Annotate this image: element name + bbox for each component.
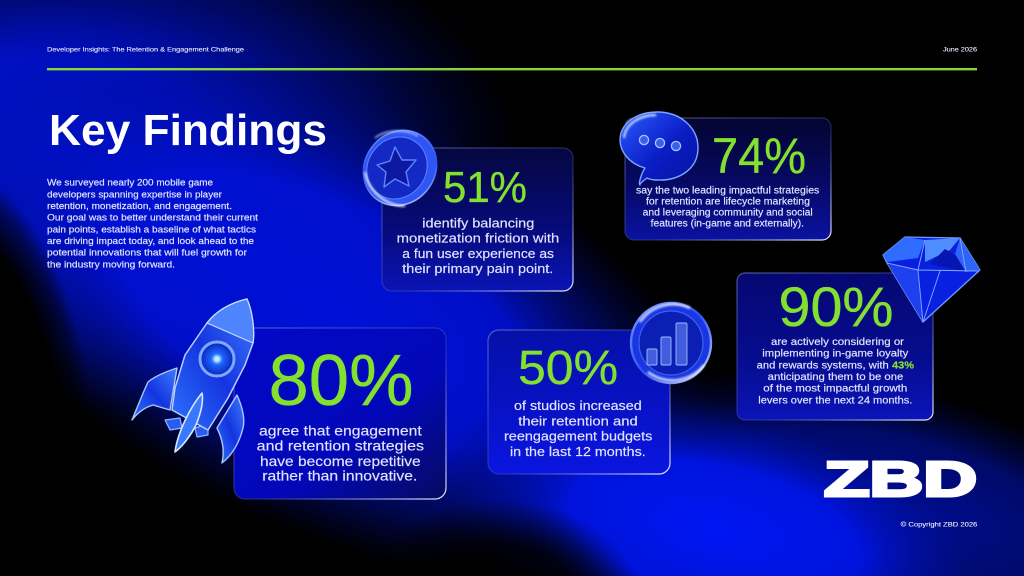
intro text block: Our goal was to better understand their current <box>47 213 259 223</box>
intro text block: potential innovations that will fuel growth for <box>47 248 247 258</box>
80% description: agree that engagement <box>259 423 422 439</box>
50% description: their retention and <box>518 413 638 428</box>
90% description: levers over the next 24 months. <box>758 395 912 406</box>
rocket nose cone <box>207 299 254 343</box>
51% description: a fun user experience as <box>402 246 555 261</box>
74% description: and leveraging community and social <box>643 208 813 219</box>
intro text block: are driving impact today, and look ahead to the <box>47 236 254 246</box>
icon: diamond <box>883 237 980 322</box>
74% description: features (in-game and externally). <box>651 219 804 230</box>
90% figure: 90% <box>778 275 894 338</box>
rocket window <box>200 342 234 376</box>
90% description: implementing in-game loyalty <box>762 349 908 360</box>
51% figure: 51% <box>443 163 527 212</box>
icon: chat bubble <box>620 112 698 185</box>
panel: 50% stat <box>488 330 670 474</box>
copyright: © Copyright ZBD 2026 <box>901 521 978 529</box>
logo: ZBD: ZBD <box>824 452 977 507</box>
panel: 74% stat <box>625 118 831 240</box>
74% description: for retention are lifecycle marketing <box>646 196 810 207</box>
rocket body <box>172 299 254 430</box>
90% description: and rewards systems, with <box>757 360 889 371</box>
intro text block: the industry moving forward. <box>47 259 175 269</box>
90% description: anticipating them to be one <box>768 372 904 383</box>
80% description: rather than innovative. <box>262 468 417 484</box>
bars <box>647 323 687 365</box>
50% figure: 50% <box>518 342 618 395</box>
intro text block: developers spanning expertise in player <box>47 189 222 199</box>
90% description: 43% <box>892 360 914 371</box>
90% description: are actively considering or <box>771 337 905 348</box>
80% figure: 80% <box>268 341 414 421</box>
50% description: of studios increased <box>514 398 642 413</box>
title: Key Findings <box>49 106 327 155</box>
51% description: their primary pain point. <box>402 261 553 276</box>
panel: 51% stat <box>382 148 573 291</box>
rocket center fin <box>175 393 203 452</box>
51% description: identify balancing <box>422 216 534 231</box>
50% description <box>504 398 653 459</box>
icon: bar chart coin <box>631 303 711 383</box>
panel: 80% stat <box>234 328 446 499</box>
panel: 90% stat <box>737 273 933 420</box>
intro text block: We surveyed nearly 200 mobile game <box>47 178 213 188</box>
icon: star coin <box>348 116 452 220</box>
rocket right fin <box>217 395 244 463</box>
74% description <box>636 185 819 230</box>
80% description: have become repetitive <box>260 453 421 469</box>
50% description: reengagement budgets <box>504 429 653 444</box>
header: report title: Developer Insights: The Retention & Engagement Challenge <box>47 46 245 54</box>
header rule <box>47 68 977 70</box>
74% description: say the two leading impactful strategies <box>636 185 819 196</box>
51% description <box>397 216 559 276</box>
90% description: of the most impactful growth <box>763 384 907 395</box>
rocket left fin <box>132 368 177 420</box>
intro text block: pain points, establish a baseline of what tactics <box>47 224 257 234</box>
icon: rocket <box>132 299 254 463</box>
intro text block <box>47 178 259 269</box>
rocket nozzle <box>165 418 208 437</box>
80% description <box>257 423 424 484</box>
80% description: and retention strategies <box>257 438 424 454</box>
header: date: June 2026 <box>943 46 977 54</box>
50% description: in the last 12 months. <box>510 444 646 459</box>
51% description: monetization friction with <box>397 231 559 246</box>
74% figure: 74% <box>712 128 806 184</box>
90% description <box>757 337 914 406</box>
intro text block: retention, monetization, and engagement. <box>47 201 232 211</box>
